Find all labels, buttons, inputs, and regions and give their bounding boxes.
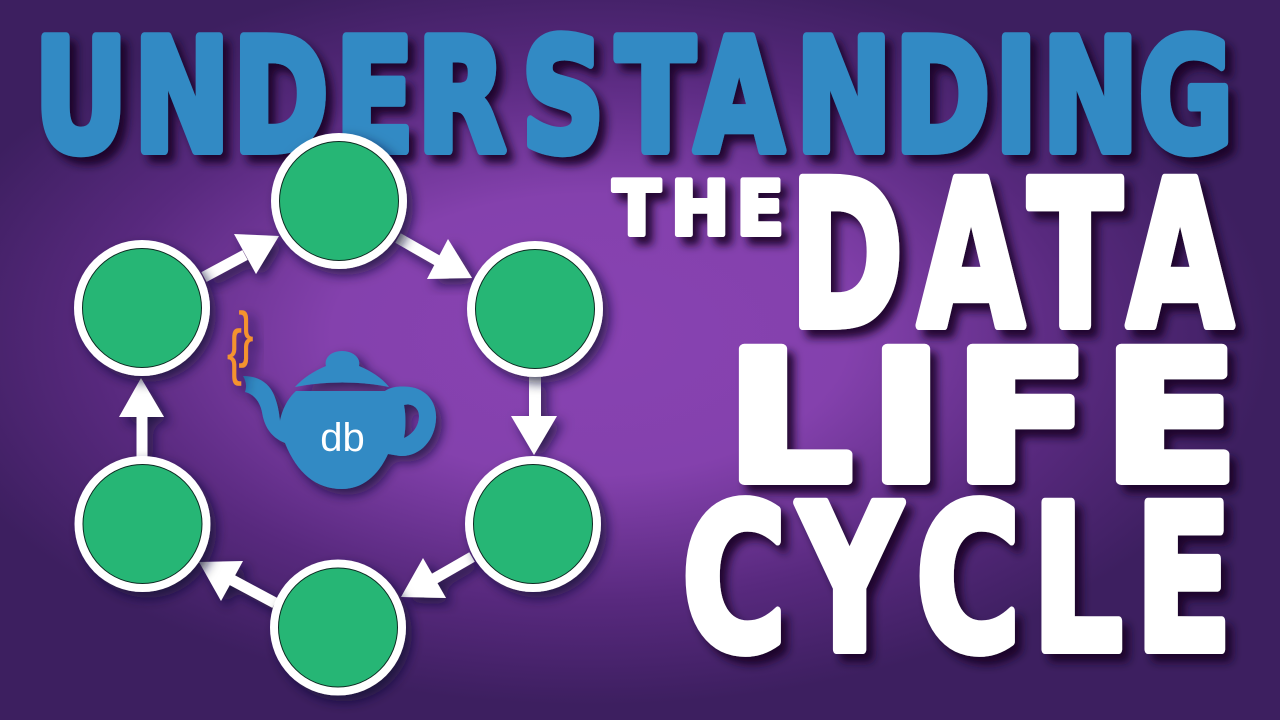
node: left bbox=[74, 240, 210, 376]
closing brace: } bbox=[239, 301, 253, 369]
arrow: left to top bbox=[204, 234, 279, 277]
arrow: top to right bbox=[398, 238, 472, 279]
teapot body, spout and handle bbox=[243, 376, 436, 489]
opening brace: { bbox=[227, 319, 242, 387]
title: the: THE bbox=[613, 166, 784, 253]
node: lower left bbox=[74, 456, 210, 592]
arrow: lower right to bottom bbox=[401, 557, 472, 598]
icon: teapot bbox=[243, 351, 436, 489]
title: life: LIFE bbox=[726, 313, 1238, 523]
arrow: bottom to lower left bbox=[199, 561, 275, 603]
arrow: right to lower right bbox=[511, 377, 557, 455]
title: understanding: UNDERSTANDING bbox=[34, 7, 1233, 188]
title: data: DATA bbox=[789, 138, 1233, 373]
node: bottom bbox=[270, 560, 406, 696]
teapot label: db bbox=[320, 416, 365, 460]
arrow: lower left to left bbox=[119, 378, 164, 458]
node: right bbox=[467, 241, 603, 377]
node: lower right bbox=[465, 456, 601, 592]
cycle diagram bbox=[74, 133, 603, 696]
title: cycle: CYCLE bbox=[682, 463, 1232, 698]
icon: curly braces bbox=[227, 301, 253, 387]
node: top bbox=[271, 133, 407, 269]
teapot lid bbox=[295, 351, 389, 387]
